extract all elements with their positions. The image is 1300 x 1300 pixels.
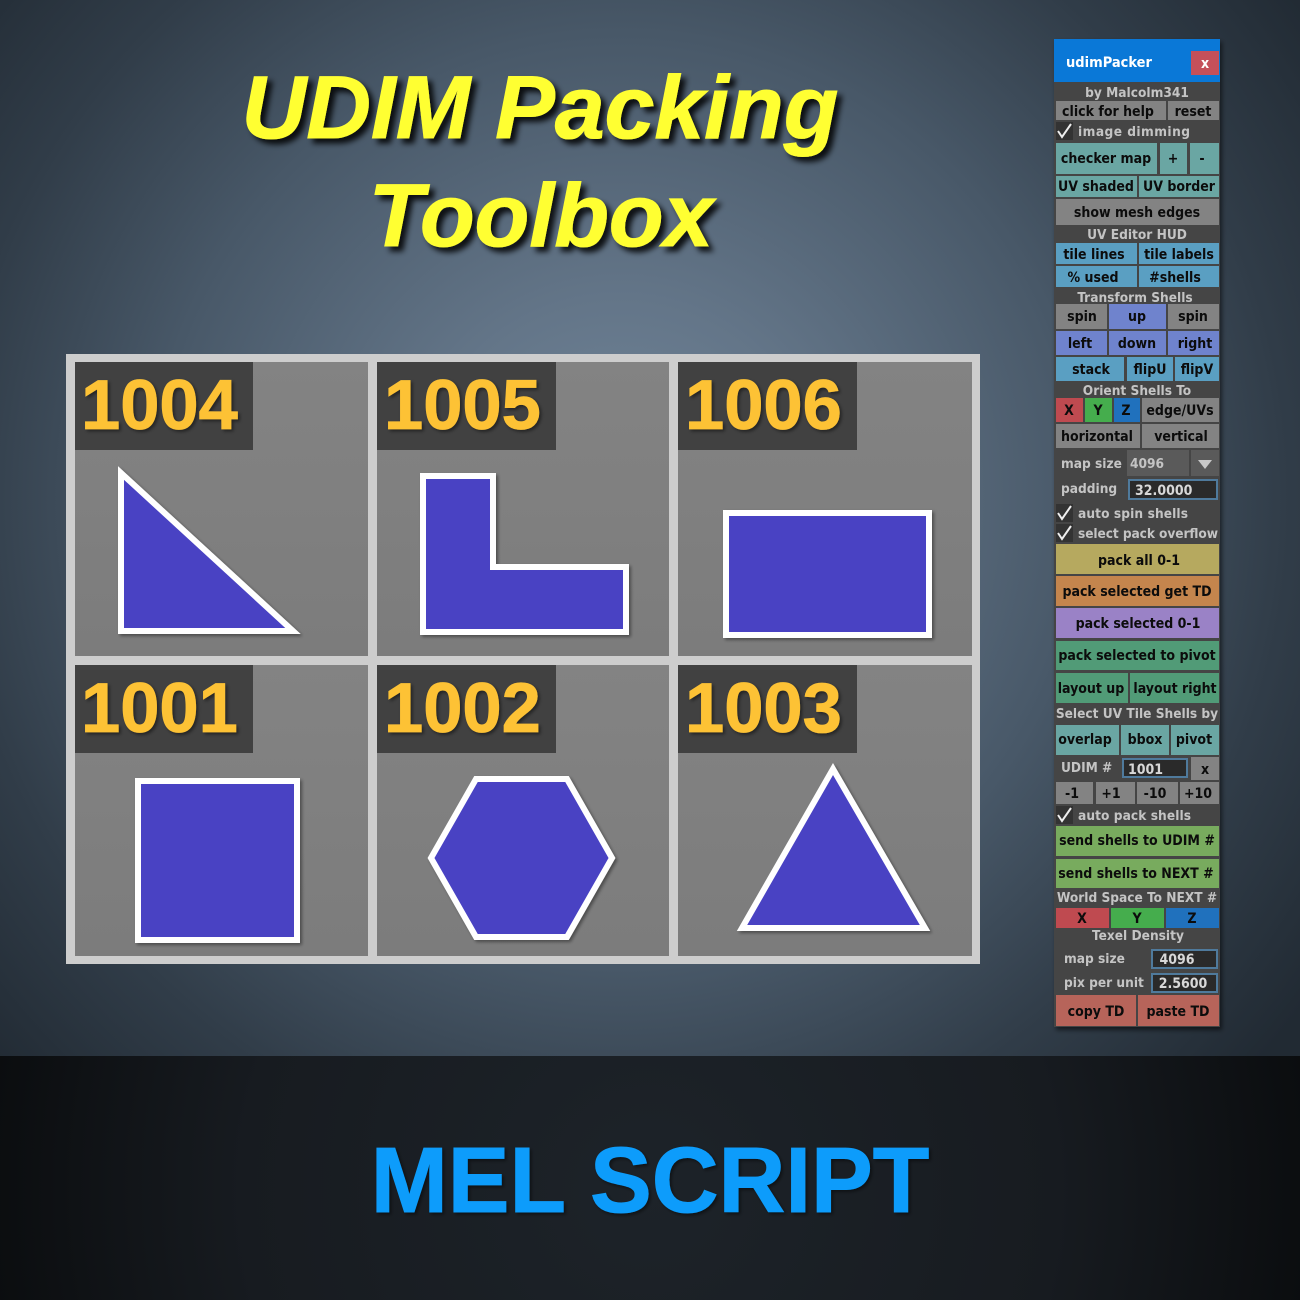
tile 1005: 1005 — [384, 365, 541, 444]
heading: World Space To NEXT #: World Space To NEXT # — [1057, 890, 1217, 906]
button: orient X: X — [1064, 403, 1074, 419]
button: spin right: spin — [1178, 309, 1208, 325]
tile 1003 — [678, 665, 972, 956]
button: flipV — [1175, 357, 1219, 381]
button: down — [1109, 331, 1166, 355]
close button — [1191, 51, 1219, 75]
field: padding value: 32.0000 — [1135, 483, 1193, 499]
heading: Select UV Tile Shells by: Select UV Tile Shells by — [1056, 706, 1218, 722]
tile 1001: 1001 — [81, 668, 238, 747]
button: +10: +10 — [1184, 786, 1212, 802]
button: stack — [1056, 357, 1124, 381]
label: pix per unit: pix per unit — [1064, 975, 1144, 991]
field: pix per unit: 2.5600 — [1159, 976, 1208, 992]
button: layout right — [1130, 673, 1219, 703]
button: #shells — [1139, 266, 1219, 287]
button: pack selected to pivot — [1056, 641, 1219, 670]
button: orient Y — [1085, 398, 1112, 422]
field: pix per unit — [1152, 974, 1217, 992]
button: tile labels: tile labels — [1144, 247, 1214, 263]
title: Toolbox — [369, 165, 717, 265]
button: copy TD — [1056, 995, 1136, 1026]
button: tile lines — [1056, 243, 1137, 264]
button: pivot: pivot — [1176, 732, 1212, 748]
button: edge/UVs — [1142, 398, 1219, 422]
button: paste TD — [1138, 995, 1219, 1026]
field: padding value — [1129, 480, 1217, 499]
button: overlap: overlap — [1058, 732, 1112, 748]
tile 1002 — [377, 665, 669, 956]
heading: Transform Shells: Transform Shells — [1077, 290, 1193, 306]
button: layout up: layout up — [1058, 681, 1124, 697]
label: padding: padding — [1061, 481, 1117, 497]
button: bbox: bbox — [1128, 732, 1162, 748]
button: UV border — [1139, 176, 1219, 197]
dropdown: map size 4096: 4096 — [1130, 456, 1164, 472]
button: pack selected get TD — [1056, 576, 1219, 606]
button: pack selected to pivot: pack selected to pivot — [1058, 648, 1216, 664]
button: left — [1056, 331, 1107, 355]
button: #shells: #shells — [1149, 270, 1201, 286]
button: orient Y: Y — [1092, 403, 1103, 419]
close button: x — [1201, 56, 1209, 72]
button: click for help: click for help — [1062, 104, 1154, 120]
button: UV border: UV border — [1143, 179, 1216, 195]
dropdown: map size 4096 — [1127, 450, 1219, 476]
button: horizontal — [1056, 424, 1140, 448]
title — [242, 57, 838, 265]
button: orient X — [1056, 398, 1083, 422]
button: spin left — [1056, 304, 1107, 329]
button: world Z: Z — [1187, 911, 1197, 927]
button: -1: -1 — [1065, 786, 1079, 802]
field: UDIM value: 1001 — [1128, 762, 1163, 778]
tile 1004: 1004 — [81, 365, 238, 444]
label: texel map size: map size — [1064, 951, 1125, 967]
button: up — [1109, 304, 1166, 329]
button: pack all 0-1 — [1056, 544, 1219, 574]
button: vertical: vertical — [1154, 429, 1208, 445]
button: -1 — [1056, 782, 1093, 804]
button: send shells to NEXT # — [1056, 859, 1219, 888]
UDIM tile grid — [66, 354, 980, 964]
heading: Orient Shells To: Orient Shells To — [1083, 383, 1191, 399]
button: % used — [1056, 266, 1137, 287]
button: world X — [1056, 908, 1109, 928]
author label: by Malcolm341 — [1085, 85, 1189, 101]
button: right — [1168, 331, 1219, 355]
button: edge/UVs: edge/UVs — [1146, 403, 1214, 419]
button: horizontal: horizontal — [1061, 429, 1133, 445]
bottom band — [0, 1056, 1300, 1300]
checkbox: select pack overflow: select pack overflow — [1078, 526, 1218, 542]
button: plus: + — [1168, 151, 1178, 167]
button: show mesh edges: show mesh edges — [1074, 205, 1200, 221]
button: minus: - — [1199, 151, 1205, 167]
button: +1 — [1096, 782, 1135, 804]
button: stack: stack — [1072, 362, 1111, 378]
button: tile labels — [1139, 243, 1219, 264]
label: map size: map size — [1061, 456, 1122, 472]
button: x: x — [1201, 762, 1209, 778]
checkbox: auto pack shells: auto pack shells — [1078, 808, 1191, 824]
button: plus — [1160, 143, 1187, 174]
button: send shells to UDIM #: send shells to UDIM # — [1059, 833, 1215, 849]
button: send shells to UDIM # — [1056, 826, 1219, 856]
tile 1004 — [75, 362, 368, 656]
button: pack selected 0-1: pack selected 0-1 — [1076, 616, 1200, 632]
button: -10: -10 — [1144, 786, 1167, 802]
window header — [1054, 39, 1220, 82]
button: tile lines: tile lines — [1063, 247, 1125, 263]
button: minus — [1190, 143, 1219, 174]
button: reset — [1168, 101, 1219, 120]
subtitle: MEL SCRIPT: MEL SCRIPT — [371, 1128, 929, 1232]
tile 1005 — [377, 362, 669, 656]
label: UDIM #: UDIM # — [1061, 760, 1112, 776]
button: orient Z — [1114, 398, 1140, 422]
field: texel map size — [1152, 950, 1217, 968]
button: right: right — [1178, 336, 1212, 352]
checkbox: image dimming: image dimming — [1078, 124, 1190, 140]
button: flipV: flipV — [1181, 362, 1213, 378]
title: UDIM Packing — [242, 57, 838, 157]
button: layout right: layout right — [1133, 681, 1217, 697]
button: vertical — [1142, 424, 1219, 448]
heading: UV Editor HUD: UV Editor HUD — [1087, 227, 1187, 243]
button: bbox — [1121, 725, 1169, 755]
button: down: down — [1118, 336, 1156, 352]
tile 1006 — [678, 362, 972, 656]
button: world Y: Y — [1131, 911, 1142, 927]
button: show mesh edges — [1056, 199, 1219, 225]
button: spin left: spin — [1067, 309, 1097, 325]
tile 1001 — [75, 665, 368, 956]
button: reset: reset — [1175, 104, 1211, 120]
field: UDIM value — [1123, 759, 1187, 778]
button: pack selected get TD: pack selected get TD — [1062, 584, 1212, 600]
button: -10 — [1137, 782, 1178, 804]
button: pack selected 0-1 — [1056, 608, 1219, 638]
button: x — [1191, 757, 1219, 780]
field: texel map size: 4096 — [1159, 952, 1195, 968]
button: send shells to NEXT #: send shells to NEXT # — [1058, 866, 1214, 882]
button: copy TD: copy TD — [1068, 1004, 1124, 1020]
button: flipU — [1127, 357, 1173, 381]
button: world Z — [1166, 908, 1219, 928]
button: pack all 0-1: pack all 0-1 — [1098, 553, 1180, 569]
button: % used: % used — [1067, 270, 1119, 286]
button: layout up — [1056, 673, 1128, 703]
button: spin right — [1168, 304, 1219, 329]
button: flipU: flipU — [1134, 362, 1166, 378]
heading: Texel Density: Texel Density — [1092, 928, 1184, 944]
checkbox: auto spin shells: auto spin shells — [1078, 506, 1188, 522]
button: world Y — [1111, 908, 1164, 928]
tile 1006: 1006 — [685, 365, 842, 444]
button: up: up — [1128, 309, 1146, 325]
button: checker map — [1056, 143, 1157, 174]
button: orient Z: Z — [1121, 403, 1131, 419]
button: checker map: checker map — [1061, 151, 1151, 167]
window header: udimPacker — [1066, 55, 1153, 71]
button: world X: X — [1077, 911, 1087, 927]
tile 1002: 1002 — [384, 668, 541, 747]
button: overlap — [1056, 725, 1119, 755]
panel: udimPacker tool window — [1054, 39, 1220, 1027]
button: paste TD: paste TD — [1146, 1004, 1210, 1020]
button: +1: +1 — [1101, 786, 1121, 802]
button: +10 — [1180, 782, 1219, 804]
button: UV shaded: UV shaded — [1058, 179, 1134, 195]
tile 1003: 1003 — [685, 668, 842, 747]
button: left: left — [1068, 336, 1092, 352]
button: pivot — [1171, 725, 1219, 755]
